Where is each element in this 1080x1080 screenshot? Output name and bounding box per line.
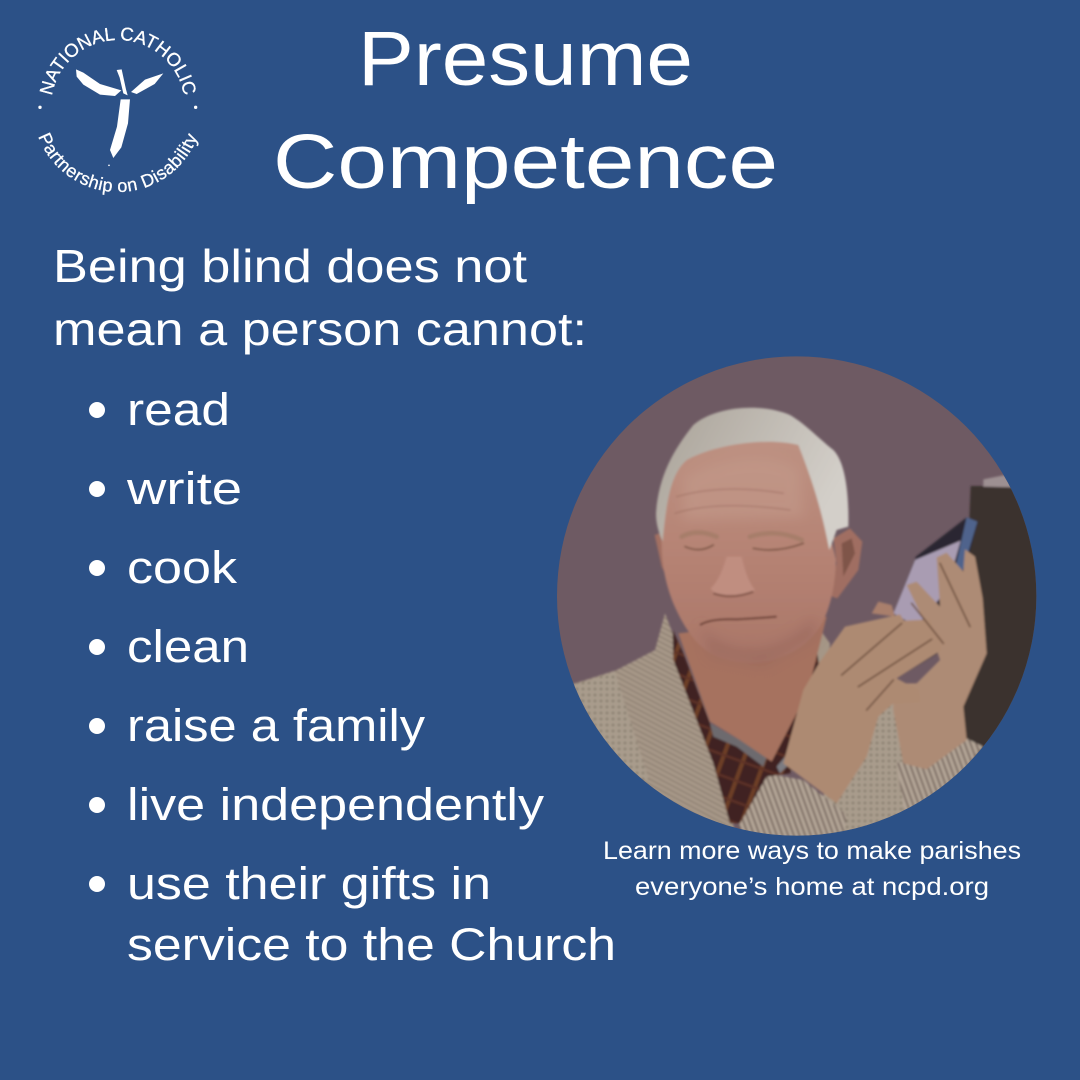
bullet list bbox=[89, 384, 616, 970]
infographic canvas bbox=[38, 28, 1036, 960]
right ear bbox=[828, 528, 862, 598]
logo: National Catholic Partnership on Disability: NATIONAL CATHOLIC bbox=[40, 28, 196, 95]
intro text bbox=[53, 240, 587, 355]
mouth bbox=[700, 617, 777, 625]
cardigan bbox=[570, 613, 737, 837]
intro text: mean a person cannot: bbox=[53, 303, 587, 355]
bullet list: cook bbox=[127, 542, 238, 593]
title: Presume bbox=[358, 16, 693, 102]
logo: National Catholic Partnership on Disability: Partnership on Disability bbox=[38, 132, 199, 195]
bullet list: live independently bbox=[127, 779, 545, 830]
hands bbox=[893, 549, 987, 769]
phone bbox=[914, 518, 968, 661]
bullet list: raise a family bbox=[127, 700, 426, 751]
cheek shading bbox=[712, 629, 811, 660]
forehead highlight bbox=[689, 476, 796, 514]
photo: older man with closed eyes holding a phone to his ear bbox=[550, 350, 1050, 850]
hair bbox=[656, 408, 848, 550]
caption: Learn more ways to make parishes bbox=[603, 837, 1021, 865]
bullet list: use their gifts in bbox=[127, 858, 491, 909]
title bbox=[273, 16, 778, 205]
caption: everyone’s home at ncpd.org bbox=[635, 873, 989, 901]
shirt bbox=[673, 630, 820, 823]
title: Competence bbox=[273, 119, 778, 205]
bullet list: read bbox=[127, 384, 230, 435]
dark panel behind phone bbox=[963, 485, 1036, 753]
bullet list: write bbox=[126, 463, 242, 514]
logo: National Catholic Partnership on Disability bbox=[38, 28, 199, 195]
left ear bbox=[654, 533, 664, 570]
face bbox=[662, 440, 836, 663]
nose bbox=[711, 557, 755, 596]
caption bbox=[603, 837, 1021, 901]
closed eyes and brows bbox=[675, 489, 803, 550]
neck bbox=[678, 617, 827, 762]
bullet list: clean bbox=[127, 621, 249, 672]
bullet list: service to the Church bbox=[127, 919, 616, 970]
intro text: Being blind does not bbox=[53, 240, 527, 292]
